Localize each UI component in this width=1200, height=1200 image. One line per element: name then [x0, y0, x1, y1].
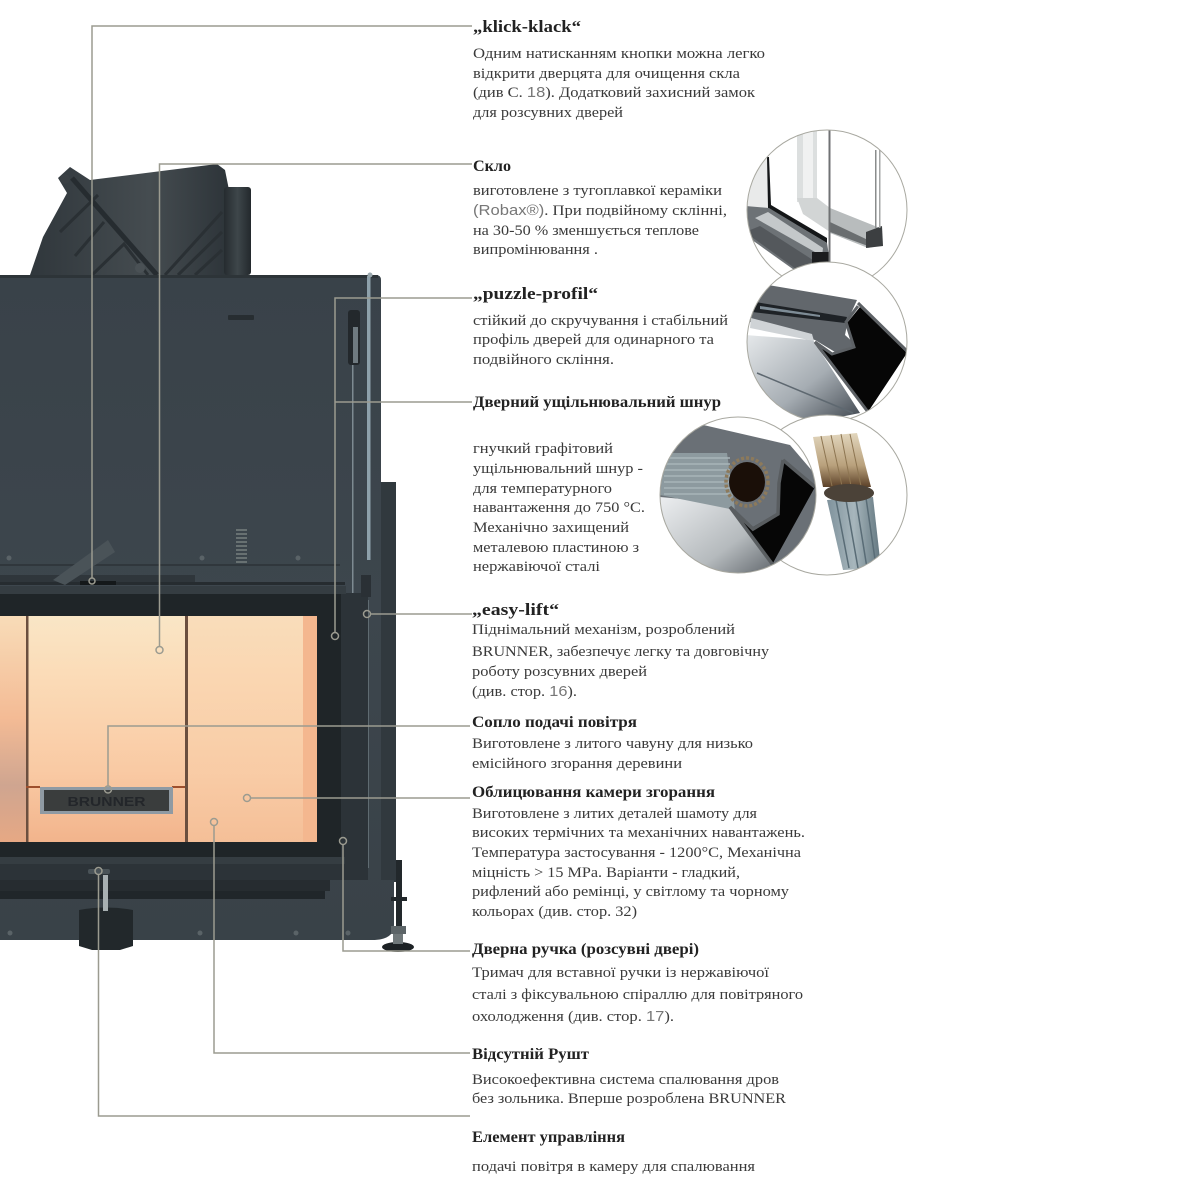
- body: ущільнювальний шнур -: [473, 461, 643, 477]
- side panel: [376, 482, 396, 882]
- heading: „klick-klack“: [473, 17, 581, 36]
- body: випромінювання .: [473, 242, 598, 258]
- body: подачі повітря в камеру для спалювання: [472, 1159, 755, 1175]
- body: (Robax®) . При подвійному склінні,: [473, 202, 727, 219]
- firebox glow: [0, 616, 317, 842]
- heading: „puzzle-profil“: [473, 284, 598, 303]
- body: охолодження (див. стор. 17).: [472, 1008, 674, 1025]
- body: металевою пластиною з: [473, 540, 639, 556]
- text: combustion chamber lining: [472, 784, 805, 920]
- body: Механічно захищений: [473, 520, 629, 536]
- text: glass: [473, 158, 727, 258]
- body: нержавіючої сталі: [473, 559, 600, 575]
- detail photo: cord in profile: [660, 425, 816, 572]
- body: [473, 441, 645, 575]
- body: [472, 806, 805, 920]
- body: Високоефективна система спалювання дров: [472, 1072, 779, 1088]
- fireplace illustration: [0, 164, 414, 952]
- leader: door seal: [335, 401, 472, 403]
- lever klick-klack: [53, 540, 115, 585]
- BRUNNER badge: BRUNNER: [68, 795, 146, 809]
- body: подвійного скління.: [473, 352, 614, 368]
- body: навантаження до 750 °C.: [473, 500, 645, 516]
- body: профіль дверей для одинарного та: [473, 332, 714, 348]
- body: [472, 622, 770, 700]
- body: [473, 313, 728, 368]
- body: виготовлене з тугоплавкої кераміки: [473, 183, 722, 199]
- body: Температура застосування - 1200°C, Механічна: [472, 845, 801, 861]
- body: (див С. 18). Додатковий захисний замок: [473, 84, 756, 101]
- leader: combustion chamber lining: [244, 794, 470, 802]
- photo ring: sealing cord: [747, 415, 907, 575]
- air control lever: [79, 869, 133, 950]
- body: роботу розсувних дверей: [472, 664, 647, 680]
- heading: Елемент управління: [472, 1129, 625, 1146]
- leader: door handle: [340, 838, 470, 951]
- leader: no grate: [210, 818, 470, 1053]
- photo ring: glass: [747, 130, 907, 290]
- body: [472, 1072, 786, 1107]
- heading: Скло: [473, 158, 511, 175]
- body of the stove: [0, 275, 394, 940]
- body: гнучкий графітовий: [473, 441, 613, 457]
- text: door seal: [473, 394, 721, 575]
- body: Піднімальний механізм, розроблений: [472, 622, 735, 638]
- heading: Дверний ущільнювальний шнур: [473, 394, 721, 411]
- leader: easy-lift: [364, 610, 472, 618]
- text: door handle: [472, 941, 803, 1025]
- body: [472, 965, 803, 1025]
- body: для температурного: [473, 481, 612, 497]
- right foot: [382, 860, 414, 952]
- text: control element: [472, 1129, 755, 1175]
- body: Одним натисканням кнопки можна легко: [473, 46, 765, 62]
- heading: „easy-lift“: [472, 600, 559, 619]
- photo ring: cord in profile: [660, 417, 816, 573]
- body: на 30-50 % зменшується теплове: [473, 223, 699, 239]
- leader: klick-klack: [89, 26, 472, 584]
- leader lines: [89, 26, 472, 1116]
- right guide rail: [341, 272, 372, 868]
- body: рифлений або ремінці, у світлому та чорному: [472, 884, 790, 900]
- body: стійкий до скручування і стабільний: [473, 313, 728, 329]
- detail photo: door profile: [745, 262, 908, 425]
- body: Виготовлене з литого чавуну для низько: [472, 736, 753, 752]
- detail photo: sealing cord: [804, 416, 880, 570]
- body: високих термічних та механічних навантажень.: [472, 825, 805, 841]
- heading: Відсутній Рушт: [472, 1046, 589, 1063]
- door rails: [0, 556, 345, 585]
- body: сталі з фіксувальною спіраллю для повітряного: [472, 987, 803, 1003]
- leader: puzzle-profil: [332, 298, 472, 640]
- text: no grate: [472, 1046, 786, 1107]
- photo ring: door profile: [747, 262, 907, 422]
- leader: glass: [156, 164, 472, 654]
- body: міцність > 15 MPa. Варіанти - гладкий,: [472, 865, 740, 881]
- BRUNNER badge: [40, 787, 173, 814]
- body: [473, 46, 765, 121]
- spring: [236, 530, 247, 562]
- leader: air nozzle: [104, 726, 470, 793]
- leader: control element: [95, 868, 470, 1116]
- body: кольорах (див. стор. 32): [472, 904, 637, 920]
- detail photo: glass: [748, 130, 883, 269]
- body: без зольника. Вперше розроблена BRUNNER: [472, 1091, 786, 1107]
- text: puzzle-profil: [473, 284, 728, 368]
- top edge: [0, 275, 378, 278]
- heading: Дверна ручка (розсувні двері): [472, 941, 699, 958]
- door frame: [0, 593, 341, 864]
- text: air nozzle: [472, 714, 753, 772]
- body: (див. стор. 16).: [472, 683, 577, 700]
- body: [473, 183, 727, 258]
- body: Тримач для вставної ручки із нержавіючої: [472, 965, 770, 981]
- body: емісійного згорання деревини: [472, 756, 682, 772]
- flue hood: [30, 164, 251, 275]
- body: відкрити дверцята для очищення скла: [473, 66, 740, 82]
- small handle slot: [228, 315, 254, 320]
- heading: Сопло подачі повітря: [472, 714, 637, 731]
- body: для розсувних дверей: [473, 105, 623, 121]
- body: [472, 736, 753, 772]
- text: klick-klack: [473, 17, 765, 121]
- body: BRUNNER, забезпечує легку та довговічну: [472, 644, 770, 660]
- lower body: [0, 864, 368, 936]
- text: easy-lift: [472, 600, 770, 700]
- heading: Облицювання камери згорання: [472, 784, 715, 801]
- body: Виготовлене з литих деталей шамоту для: [472, 806, 757, 822]
